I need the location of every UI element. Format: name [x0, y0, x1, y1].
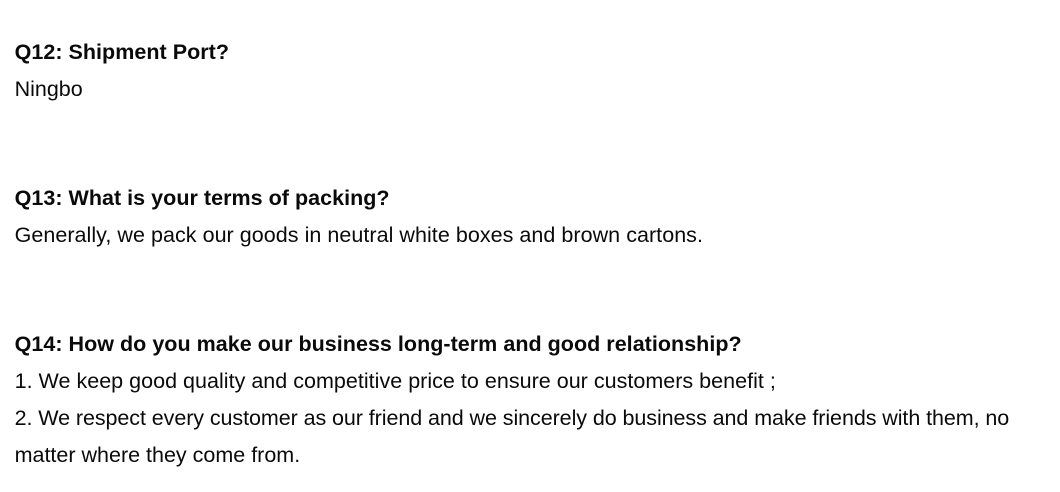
heading: Q12: Q12: Shipment Port?	[15, 40, 229, 64]
heading: Q13: Q13: What is your terms of packing?	[15, 186, 390, 210]
text: Q13 answer: Generally, we pack our goods in neutral white boxes and brown cartons.	[15, 223, 703, 247]
text: Q14 answer point 2: 2. We respect every customer as our friend and we sincerely do business and make friends with them, no	[15, 406, 1009, 430]
text: Q14 answer point 1: 1. We keep good quality and competitive price to ensure our customers benefit ;	[15, 369, 776, 393]
heading: Q14: Q14: How do you make our business long-term and good relationship?	[15, 332, 742, 356]
text: Q14 answer point 2 continued: matter where they come from.	[15, 443, 300, 467]
text: Q12 answer: Ningbo	[15, 77, 83, 101]
